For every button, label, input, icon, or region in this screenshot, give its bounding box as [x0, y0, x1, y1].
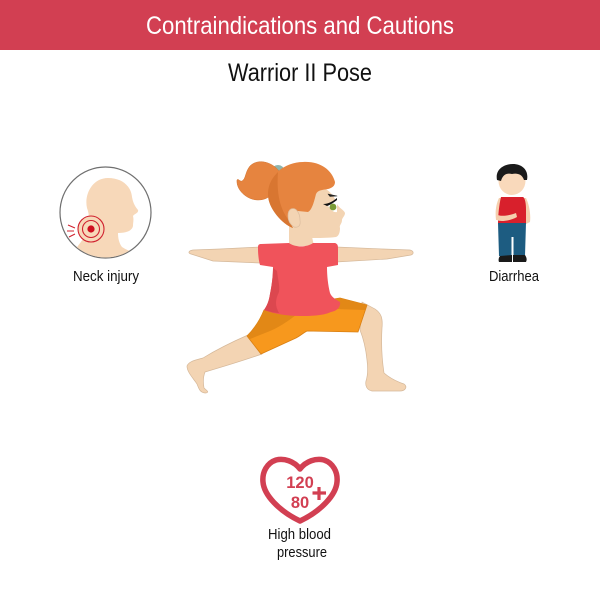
icon: plus: [312, 487, 326, 500]
icon: head and shoulders silhouette: [77, 178, 138, 258]
title: Warrior II Pose: [228, 59, 372, 87]
shirt: [258, 243, 340, 316]
hair shading: [268, 172, 293, 228]
icon: forearm: [496, 213, 517, 221]
front leg: [360, 302, 406, 391]
ponytail hair tie: [272, 165, 284, 175]
hair: [268, 162, 335, 228]
icon: neck injury circle: [60, 167, 151, 258]
icon: shirt: [498, 197, 526, 224]
panel: diarrhea: [489, 164, 540, 285]
figure: woman in warrior II pose: [187, 162, 413, 393]
label: high blood pressure: High blood: [268, 526, 331, 543]
icon: reading 80: 80: [291, 494, 309, 512]
eye: [325, 199, 337, 212]
shorts shadow: [247, 298, 367, 339]
icon: reading 120: 120: [286, 474, 314, 492]
panel: neck injury: [60, 167, 151, 285]
shirt shadow: [264, 268, 279, 313]
right arm: [336, 247, 413, 262]
ear: [288, 209, 300, 227]
icon: shoes: [499, 255, 527, 262]
icon: pain target: [67, 216, 104, 242]
eyebrow: [328, 194, 337, 196]
shorts: [247, 298, 367, 354]
panel: high blood pressure: [263, 459, 337, 561]
header banner: [0, 0, 600, 50]
label: neck injury: Neck injury: [73, 268, 139, 285]
icon: hair: [497, 164, 527, 181]
icon: head: [498, 167, 526, 195]
icon: trousers: [498, 223, 526, 256]
back leg: [187, 335, 262, 393]
icon: heart outline: [263, 459, 337, 521]
label: high blood pressure: pressure: [277, 544, 327, 561]
left arm: [189, 247, 260, 263]
icon: arms: [496, 198, 530, 224]
head skin: [288, 186, 345, 238]
header banner: Contraindications and Cautions: [146, 12, 454, 40]
eyelashes: [323, 198, 337, 206]
label: high blood pressure: [268, 526, 331, 561]
iris: [330, 204, 336, 210]
label: diarrhea: Diarrhea: [489, 268, 540, 285]
ponytail: [237, 162, 279, 200]
neck: [289, 225, 314, 246]
